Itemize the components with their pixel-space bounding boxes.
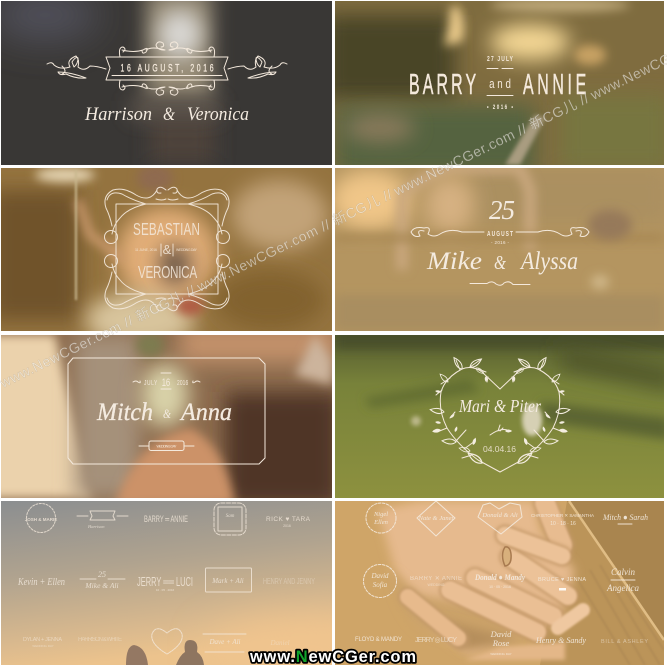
title lockup: 27 JULY	[487, 56, 513, 63]
wreath title	[25, 504, 57, 532]
title lockup: 16	[162, 377, 170, 389]
diagonal watermark: www.NewCGer.com // 新CG儿 //	[390, 90, 591, 199]
David and Rose title	[490, 629, 512, 656]
names and date: WEDDING DAY	[176, 248, 198, 252]
date text: 16 AUGUST, 2016	[120, 62, 214, 74]
Calvin and Angelica title: Angelica	[606, 583, 639, 593]
background: blurred green lawn	[335, 325, 667, 498]
wreath title: JOSH & MARIE	[25, 517, 57, 522]
Barry and Annie mini title: BARRY ═ ANNIE	[144, 514, 188, 524]
names and date	[134, 223, 199, 278]
panel: Barry and Annie	[325, 0, 667, 175]
diamond title	[417, 501, 455, 536]
Donald and Mandy title: Donald ● Mandy	[474, 572, 525, 582]
title lockup: WEDDING DAY	[156, 444, 177, 448]
Mike and Ali mini title: Mike & Ali	[84, 581, 119, 590]
title lockup: JULY	[144, 380, 157, 387]
diamond title: Nate & Janet	[418, 515, 454, 522]
swirled frame	[104, 187, 230, 311]
collection titles	[355, 501, 648, 656]
panel: Mike and Alyssa	[330, 165, 667, 331]
banner title	[77, 511, 128, 529]
wreath title David and Sofia	[364, 564, 396, 598]
Donald and Mandy title: 10 · 05 · 2016	[489, 585, 511, 589]
title lockup	[96, 373, 232, 450]
Kevin and Ellen mini title: Kevin + Ellen	[17, 577, 65, 588]
title lockup: • 2016 •	[487, 104, 513, 111]
faint script title: Daniel	[269, 639, 290, 647]
diagonal watermark: www.NewCGer.com // 新CG儿 //	[193, 186, 394, 295]
names and date: 11 JUNE, 2016	[135, 248, 157, 252]
title lockup: Alyssa	[519, 248, 578, 275]
Rick and Tara mini title: RICK ♥ TARA	[266, 516, 311, 523]
date ornament with doves	[47, 42, 287, 95]
Bruce and Jenna title	[538, 577, 586, 590]
Barry and Annie title	[410, 576, 462, 587]
title lockup: AUGUST	[487, 231, 513, 238]
Christopher and Samantha mini title: CHRISTOPHER ✕ SAMANTHA	[531, 513, 594, 518]
title lockup: ANNIE	[523, 68, 586, 100]
right half of heart	[500, 356, 570, 472]
Jerry and Lucy title: JERRY ◎ LUCY	[415, 637, 457, 644]
icon: sprig	[490, 425, 512, 435]
wreath title David and Sofia: Sofia	[373, 581, 388, 589]
title lockup: and	[489, 78, 511, 91]
Dave and Ali mini title	[203, 634, 246, 652]
rectangle frame title	[206, 568, 252, 592]
background: dark blurred photo	[0, 0, 332, 165]
Bill and Ashley title: BILL & ASHLEY	[601, 639, 648, 645]
title lockup	[411, 195, 589, 285]
panel: Harrison and Veronica	[0, 0, 332, 165]
Donald and Mandy title	[474, 572, 525, 589]
Calvin and Angelica title	[606, 567, 639, 593]
names: Harrison	[84, 104, 152, 125]
title lockup: Anna	[179, 399, 232, 426]
names: &	[163, 104, 175, 125]
background: blurred garden at sunset	[325, 0, 667, 175]
Calvin and Angelica title: Calvin	[611, 567, 635, 577]
Floyd and Mandy title: FLOYD & MANDY	[355, 637, 402, 643]
date: 04.04.16	[483, 444, 516, 454]
Henry and Jenny mini title: HENRY AND JENNY	[263, 576, 315, 586]
heart title	[478, 503, 522, 534]
background: blurred wedding arch	[330, 165, 667, 331]
names and date: SEBASTIAN	[133, 220, 200, 240]
icon: left dove	[47, 56, 106, 78]
Dave and Ali mini title: Dave + Ali	[208, 638, 241, 646]
Dylan and Jenna mini title: DYLAN + JENNA	[23, 637, 62, 643]
title lockup: BARRY	[409, 68, 476, 100]
heart title	[152, 629, 182, 654]
diagonal watermark: www.NewCGer.com // 新CG儿 //	[0, 282, 198, 391]
Rick and Tara mini title: 2016	[283, 524, 291, 528]
Henry and Sandy title: Henry & Sandy	[535, 636, 586, 645]
banner title: Harrison	[87, 524, 105, 529]
title lockup: &	[163, 406, 172, 421]
Mike and Ali mini title	[80, 572, 126, 588]
wreath title David and Sofia: David	[370, 572, 389, 580]
Barry and Annie title: BARRY ✕ ANNIE	[410, 576, 462, 582]
left half of heart	[430, 356, 500, 472]
David and Rose title: Rose	[492, 638, 509, 648]
title lockup: 25	[489, 195, 515, 225]
Jerry and Luci mini title: 10 . 05 . 2016	[156, 588, 175, 592]
Harrison mini title: HARRISON & WHITE	[78, 637, 122, 643]
wreath title Nigel and Ellen: Ellen	[373, 519, 388, 526]
names: Veronica	[187, 104, 249, 125]
title lockup: &	[494, 252, 506, 274]
David and Rose title: WEDDING DAY	[490, 652, 512, 656]
background: holding hands with wood	[335, 501, 664, 665]
Christopher and Samantha mini title	[531, 513, 594, 527]
Christopher and Samantha mini title: 10 · 18 · 16	[550, 521, 576, 527]
David and Rose title: David	[490, 629, 512, 639]
names and date: &	[163, 242, 172, 257]
names: Mari & Piter	[458, 396, 542, 416]
notched frame	[68, 358, 265, 464]
background: blurred close-up with flower	[1, 335, 332, 498]
Dylan and Jenna mini title: WEDDING DAY	[32, 644, 54, 648]
Barry and Annie title: WEDDING	[428, 583, 445, 587]
background: blurred couple on a swing	[1, 168, 332, 331]
Jerry and Luci mini title	[137, 574, 193, 592]
title lockup: - 2016 -	[491, 240, 510, 245]
swirl frame title: Sam	[226, 514, 235, 519]
title lockup	[409, 56, 586, 111]
Bruce and Jenna title: BRUCE ♥ JENNA	[538, 577, 586, 583]
icon: botanical heart wreath	[430, 356, 570, 472]
panel: title collection over sunset	[1, 501, 332, 665]
panel: title collection over hands	[335, 501, 664, 665]
diagonal watermark	[0, 0, 667, 391]
names and date: VERONICA	[138, 263, 198, 283]
panel: Mari and Piter	[335, 325, 667, 498]
wreath title Nigel and Ellen	[366, 503, 396, 533]
panel: Sebastian and Veronica	[1, 168, 332, 331]
rectangle frame title: Mark + Ali	[211, 577, 244, 585]
title lockup: Mitch	[96, 399, 153, 426]
background: sunset gradient with couple silhouette	[1, 501, 332, 665]
collection titles	[17, 503, 315, 654]
Jerry and Luci mini title: JERRY ══ LUCI	[137, 574, 193, 589]
Dylan and Jenna mini title	[23, 637, 62, 648]
panel: Mitch and Anna	[1, 335, 332, 498]
wreath title Nigel and Ellen: Nigel	[373, 511, 388, 518]
Mike and Ali mini title: 25	[98, 570, 106, 579]
title lockup: 2016	[177, 380, 189, 387]
heart title: Donald & Ali	[481, 512, 518, 519]
Mitch and Sarah mini title: Mitch ● Sarah	[602, 512, 648, 522]
Rick and Tara mini title	[266, 516, 310, 527]
site logo banner: www.NewCGer.com	[249, 648, 416, 666]
icon: right dove	[228, 56, 287, 78]
title lockup: Mike	[426, 248, 482, 275]
names	[84, 108, 248, 120]
swirl frame title	[214, 503, 246, 535]
